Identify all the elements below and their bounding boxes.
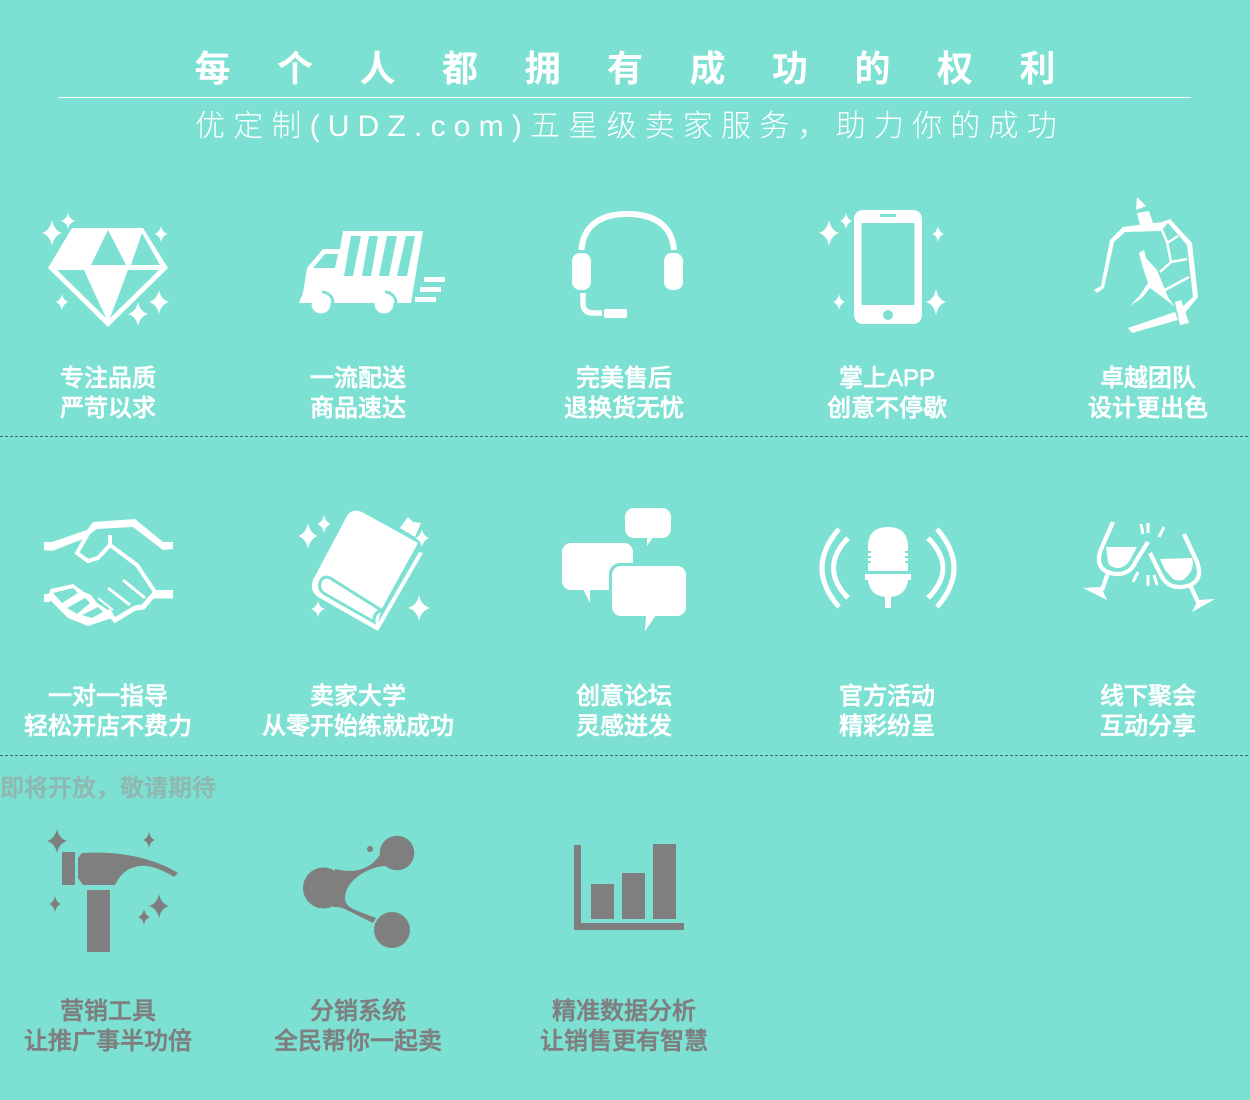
icon: phone [819,210,946,324]
icon: share nodes [303,836,414,948]
label: 营销工具 [60,998,156,1025]
label: 轻松开店不费力 [24,713,192,740]
label: 让销售更有智慧 [540,1028,708,1055]
label: 商品速达 [310,395,406,422]
label: 掌上APP [839,365,935,392]
icon: microphone [822,527,954,608]
label: 互动分享 [1100,713,1196,740]
item: meetups [1083,522,1215,740]
label: 全民帮你一起卖 [274,1028,442,1055]
section heading: coming soon: 即将开放，敬请期待 [0,775,216,802]
label: 卓越团队 [1100,365,1196,392]
item: university [262,511,454,740]
icon: book [298,511,432,631]
label: 线下聚会 [1100,683,1196,710]
label: 一对一指导 [48,683,168,710]
icon: bar chart [574,844,684,930]
label: 创意论坛 [576,683,672,710]
icon: wine glasses [1083,522,1215,612]
icon: headset [572,214,683,318]
icon: truck [299,231,445,314]
item: events [822,527,954,740]
icon: diamond [42,213,169,327]
title: 每个人都拥有成功的权利 [194,48,1102,89]
label: 精准数据分析 [552,998,696,1025]
label: 完美售后 [576,365,672,392]
item: after-sales [564,214,684,422]
item: distribution [274,836,442,1055]
label: 卖家大学 [310,683,406,710]
item: marketing tools [24,829,192,1055]
item: team [1088,197,1208,422]
label: 创意不停歇 [827,395,947,422]
icon: handshake [44,519,173,626]
item: app [819,210,947,422]
label: 退换货无忧 [564,395,684,422]
icon: chat bubbles [562,508,689,631]
item: mentoring [24,519,192,740]
label: 灵感迸发 [576,713,672,740]
label: 严苛以求 [60,395,156,422]
item: forum [562,508,689,740]
label: 分销系统 [310,998,406,1025]
label: 一流配送 [310,365,406,392]
label: 让推广事半功倍 [24,1028,192,1055]
subtitle: 优定制(UDZ.com)五星级卖家服务，助力你的成功 [195,110,1065,143]
label: 从零开始练就成功 [262,713,454,740]
label: 官方活动 [839,683,935,710]
item: delivery [299,231,445,422]
item: quality [42,213,169,422]
label: 设计更出色 [1088,395,1208,422]
icon: hammer [47,829,178,952]
icon: hand holding pen [1094,197,1198,333]
label: 精彩纷呈 [839,713,935,740]
label: 专注品质 [60,365,156,392]
item: data analysis [540,844,708,1055]
